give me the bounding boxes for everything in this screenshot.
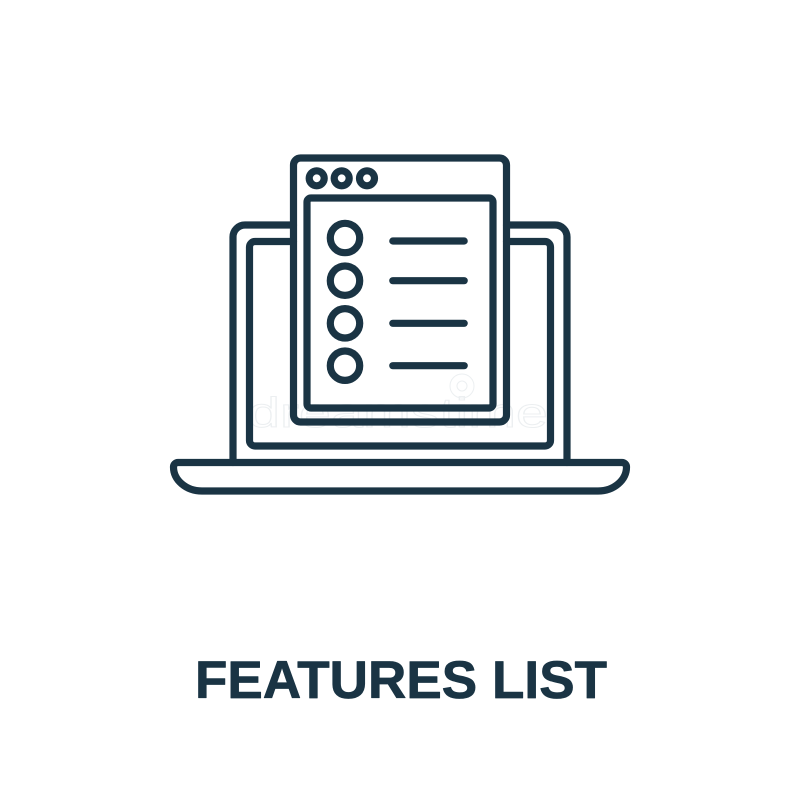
- watermark: [248, 374, 548, 436]
- icon: laptop with features list window: [174, 158, 626, 491]
- title: FEATURES LIST: [195, 651, 607, 710]
- list lines: [393, 241, 464, 366]
- document panel outline: [307, 198, 493, 408]
- list bullets: [330, 223, 360, 380]
- watermark: dreamstime: [248, 389, 548, 436]
- browser window outline: [294, 158, 506, 422]
- window control dots: [309, 171, 374, 186]
- laptop lid outline: [233, 225, 567, 462]
- laptop base: [174, 462, 626, 491]
- laptop screen outline: [250, 242, 550, 446]
